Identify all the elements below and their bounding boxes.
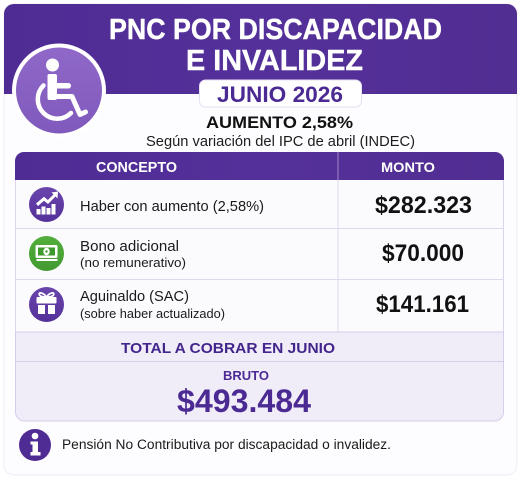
- row: bono adicional: (no remunerativo): [80, 256, 186, 270]
- row: aguinaldo: Aguinaldo (SAC): [80, 289, 189, 305]
- row: aguinaldo: (sobre haber actualizado): [80, 307, 225, 321]
- row: bono adicional: $70.000: [382, 240, 464, 267]
- table header: CONCEPTO: [96, 160, 177, 176]
- table header: MONTO: [381, 160, 435, 175]
- row: haber con aumento: $282.323: [375, 192, 472, 219]
- panel: total: BRUTO: [223, 368, 269, 383]
- panel: total: [16, 332, 504, 421]
- subtitle: source: Según variación del IPC de abril (INDEC): [146, 134, 415, 150]
- row: bono adicional: [29, 236, 464, 271]
- panel: table: [15, 152, 504, 421]
- title: PNC POR DISCAPACIDAD: [109, 14, 442, 46]
- footnote: Pensión No Contributiva por discapacidad o invalidez.: [62, 437, 391, 452]
- date pill: [200, 80, 362, 107]
- panel: total: $493.484: [177, 383, 311, 419]
- icon: gift: [29, 287, 64, 322]
- title: E INVALIDEZ: [186, 45, 363, 77]
- header banner: [4, 4, 517, 94]
- icon: wheelchair: [12, 44, 106, 138]
- icon: banknote: [29, 236, 64, 271]
- title: [109, 14, 442, 77]
- row: bono adicional: Bono adicional: [80, 239, 179, 255]
- row: aguinaldo: $141.161: [376, 291, 469, 318]
- subtitle: increase: AUMENTO 2,58%: [206, 113, 353, 132]
- date pill: JUNIO 2026: [217, 82, 343, 107]
- row: haber con aumento: Haber con aumento (2,58%): [80, 199, 264, 215]
- table header: [15, 152, 504, 180]
- panel: total: TOTAL A COBRAR EN JUNIO: [121, 340, 335, 357]
- row: haber con aumento: [29, 187, 472, 222]
- icon: growth chart: [29, 187, 64, 222]
- row: aguinaldo: [29, 287, 469, 322]
- icon: info: [19, 429, 51, 461]
